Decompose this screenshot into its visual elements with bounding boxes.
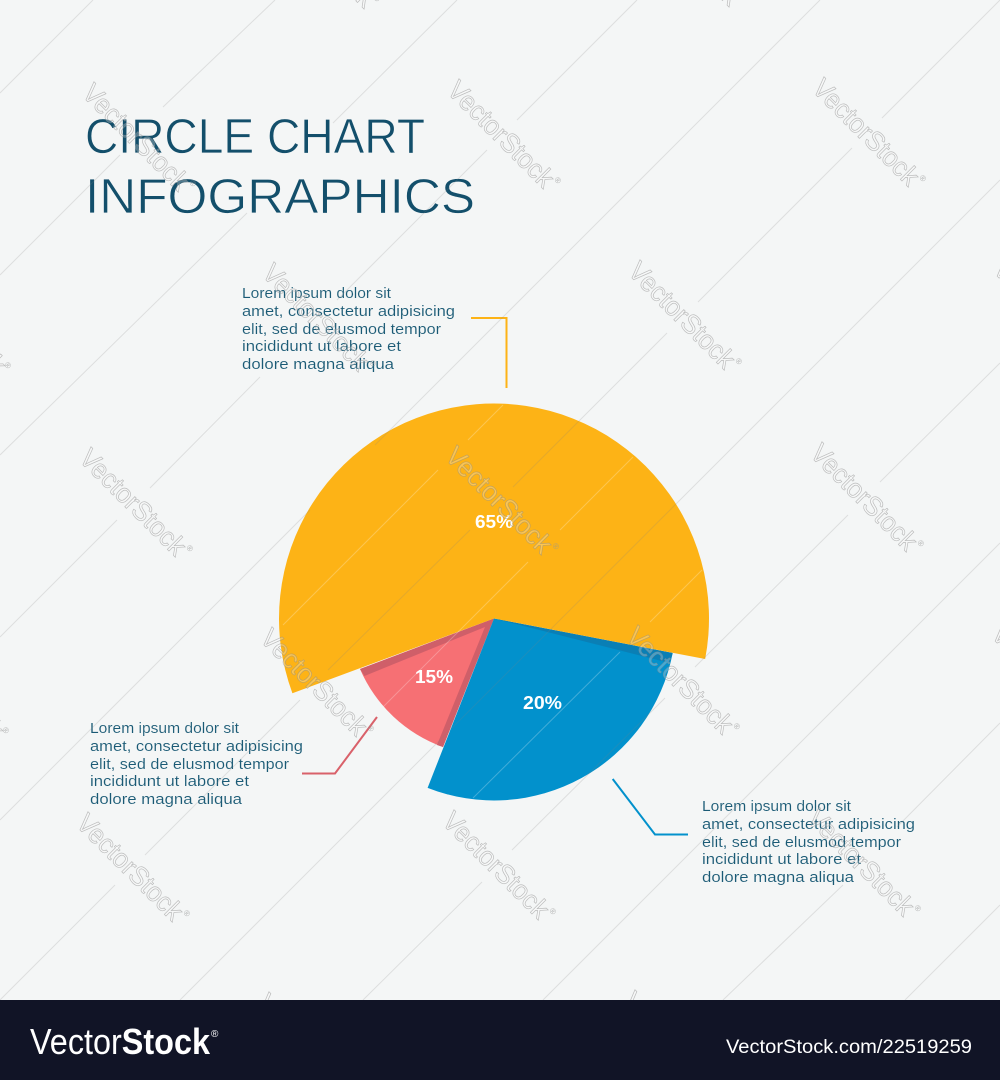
watermarks: VectorStock	[73, 443, 193, 562]
label: 15%: 15%	[415, 666, 453, 687]
watermarks: V	[251, 988, 285, 1022]
watermarks: ®	[547, 906, 558, 917]
watermarks: ®	[184, 543, 195, 554]
text block: 20% description: Lorem ipsum dolor sit	[702, 799, 851, 815]
connector: blue	[613, 779, 688, 834]
footer bar	[0, 1000, 1000, 1080]
watermarks: VectorStock	[441, 75, 561, 194]
text block: 65% description: elit, sed de elusmod tempor	[242, 322, 441, 338]
text block: 15% description: dolore magna aliqua	[90, 792, 243, 808]
watermarks: ®	[915, 538, 926, 549]
slice: 20% blue	[428, 618, 673, 800]
text block: 65% description: dolore magna aliqua	[242, 357, 395, 373]
watermarks: VectorStock	[256, 258, 376, 377]
pie chart	[279, 403, 709, 800]
footer logo: VectorStock	[30, 1021, 211, 1062]
watermarks: VectorStock	[70, 808, 190, 927]
text block: 20% description: incididunt ut labore et	[702, 852, 861, 868]
label: 20%: 20%	[523, 692, 562, 713]
watermarks: ®	[550, 541, 561, 552]
text block: 15% description	[90, 721, 303, 808]
watermarks: ®	[552, 175, 563, 186]
watermarks: ®	[365, 723, 376, 734]
registered mark: ®	[211, 1029, 219, 1040]
title: CIRCLE CHART	[85, 110, 425, 164]
connector: yellow	[471, 318, 506, 388]
text block: 65% description	[242, 286, 455, 373]
watermarks: VectorStock	[254, 623, 374, 742]
slice: 65% yellow	[279, 403, 709, 693]
text block: 15% description: incididunt ut labore et	[90, 774, 249, 790]
watermarks: VectorStock	[801, 803, 921, 922]
title	[85, 110, 475, 224]
watermarks: VectorStock	[622, 256, 742, 375]
watermarks: ®	[0, 725, 11, 736]
watermarks: ®	[367, 358, 378, 369]
watermarks: ®	[2, 360, 13, 371]
watermarks: ®	[187, 178, 198, 189]
watermarks: VectorStock	[804, 438, 924, 557]
shadow on pink slice	[360, 618, 494, 747]
watermarks: VectorStock	[806, 73, 926, 192]
connector: pink	[302, 717, 377, 774]
watermarks: V	[617, 986, 651, 1020]
watermarks: VectorStock	[436, 806, 556, 925]
text block: 15% description: Lorem ipsum dolor sit	[90, 721, 239, 737]
title: INFOGRAPHICS	[85, 170, 475, 224]
text block: 65% description: Lorem ipsum dolor sit	[242, 286, 391, 302]
shadow on blue slice	[494, 618, 673, 663]
text block: 20% description	[702, 799, 915, 886]
text block: 65% description: amet, consectetur adipisicing	[242, 304, 455, 320]
label: 65%: 65%	[475, 511, 513, 532]
text block: 20% description: elit, sed de elusmod tempor	[702, 835, 901, 851]
text block: 15% description: elit, sed de elusmod tempor	[90, 757, 289, 773]
text block: 20% description: amet, consectetur adipisicing	[702, 817, 915, 833]
watermarks: VectorStock	[76, 78, 196, 197]
watermarks: ®	[917, 173, 928, 184]
text block: 15% description: amet, consectetur adipisicing	[90, 739, 303, 755]
watermarks: ®	[733, 356, 744, 367]
footer image id: VectorStock.com/22519259	[726, 1037, 972, 1058]
watermarks: VectorStock	[620, 621, 740, 740]
watermarks: ®	[181, 908, 192, 919]
watermarks: VectorStock	[439, 441, 559, 560]
watermarks: ®	[912, 903, 923, 914]
watermarks: ®	[731, 721, 742, 732]
text block: 65% description: incididunt ut labore et	[242, 339, 401, 355]
slice: 15% pink	[360, 618, 494, 747]
text block: 20% description: dolore magna aliqua	[702, 870, 855, 886]
